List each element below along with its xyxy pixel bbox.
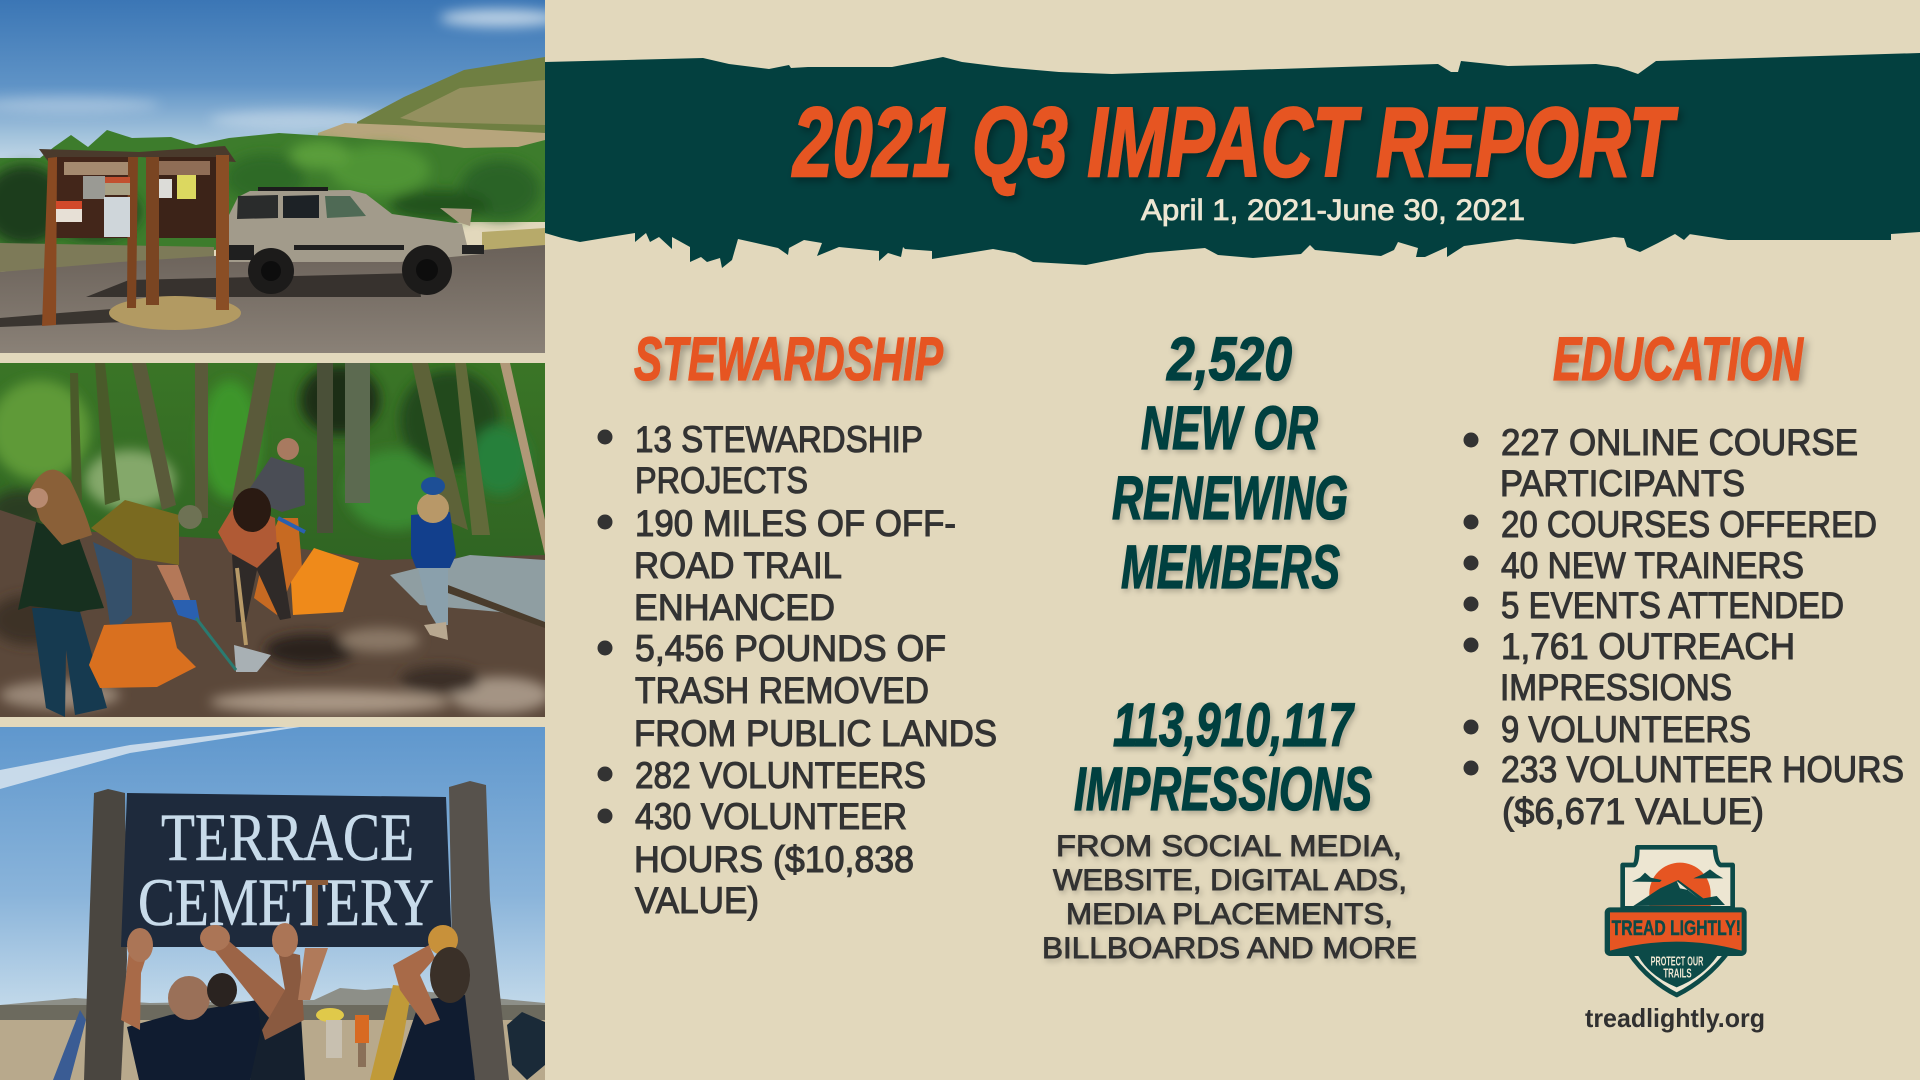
right post (449, 781, 509, 1080)
stewardship list: PROJECTS (635, 460, 808, 501)
panel: members stat: 2,520 (1166, 325, 1292, 393)
education list: IMPRESSIONS (1500, 667, 1732, 708)
background person with umbrella (316, 1008, 369, 1067)
banner: torn dark green strip (545, 53, 1920, 268)
jeep shadow (86, 273, 421, 297)
education list: 5 EVENTS ATTENDED (1501, 585, 1844, 626)
orange trash bag right (291, 548, 359, 615)
stewardship list: ENHANCED (634, 587, 835, 628)
person: girl in green sweater (18, 470, 107, 717)
education list: PARTICIPANTS (1500, 463, 1745, 504)
person: girl in blue jacket (411, 477, 456, 640)
stewardship heading: STEWARDSHIP (634, 325, 943, 393)
logo: tread lightly shield: PROTECT OUR (1651, 955, 1703, 969)
stewardship list: HOURS ($10,838 (634, 839, 914, 880)
education list: 9 VOLUNTEERS (1501, 709, 1751, 750)
person: man in plaid shirt (91, 500, 202, 632)
panel: members stat: RENEWING (1112, 464, 1348, 532)
panel: members stat: MEMBERS (1121, 533, 1340, 601)
impressions description: MEDIA PLACEMENTS, (1066, 898, 1393, 931)
date range subtitle: April 1, 2021-June 30, 2021 (1141, 194, 1525, 227)
logo: tread lightly shield: TRAILS (1663, 966, 1692, 980)
dry grass tuft (109, 296, 241, 330)
impressions figure: IMPRESSIONS (1074, 755, 1372, 823)
stewardship list: TRASH REMOVED (635, 670, 929, 711)
panel: stewardship (598, 325, 997, 921)
stewardship list (598, 419, 997, 921)
logo: tread lightly shield (1605, 847, 1747, 995)
stewardship list: 190 MILES OF OFF- (635, 503, 956, 544)
kiosk (39, 146, 236, 326)
impressions description: BILLBOARDS AND MORE (1042, 932, 1417, 965)
stewardship list: 5,456 POUNDS OF (635, 628, 946, 669)
panel: members stat: NEW OR (1141, 394, 1318, 462)
panel: education (1464, 325, 1904, 832)
panel: impressions stat (1042, 691, 1417, 965)
sign board: CEMETERY (138, 864, 434, 940)
education list: 1,761 OUTREACH (1501, 626, 1795, 667)
education list (1464, 422, 1904, 832)
jeep (229, 187, 484, 295)
sign board: TERRACE (161, 799, 414, 875)
education list: 20 COURSES OFFERED (1501, 504, 1877, 545)
photo: kiosk and jeep (0, 0, 560, 353)
education list: ($6,671 VALUE) (1502, 791, 1764, 832)
impressions figure (1074, 691, 1372, 823)
panel: members stat (1112, 325, 1348, 601)
blue brace and ladder (53, 1010, 86, 1080)
stewardship list: 282 VOLUNTEERS (635, 755, 926, 796)
far right person (507, 1012, 545, 1080)
stewardship list: VALUE) (635, 880, 759, 921)
education heading: EDUCATION (1553, 325, 1804, 393)
volunteers lifting the sign (121, 923, 475, 1080)
impressions description: WEBSITE, DIGITAL ADS, (1053, 864, 1407, 897)
stewardship list: 13 STEWARDSHIP (635, 419, 923, 460)
logo: tread lightly shield: TREAD LIGHTLY! (1612, 916, 1741, 940)
stewardship list: ROAD TRAIL (634, 545, 842, 586)
stewardship list: FROM PUBLIC LANDS (634, 713, 997, 754)
photo: terrace cemetery sign (0, 727, 545, 1080)
shovel (196, 518, 305, 672)
sign board (121, 793, 452, 947)
impressions description: FROM SOCIAL MEDIA, (1056, 830, 1402, 863)
person: man with orange pants (250, 438, 305, 615)
impressions description (1042, 830, 1417, 965)
person: woman in rust top (218, 488, 291, 622)
website url: treadlightly.org (1585, 1003, 1765, 1033)
impressions figure: 113,910,117 (1113, 691, 1355, 759)
orange trash bag left (89, 622, 196, 688)
education list: 40 NEW TRAINERS (1501, 545, 1804, 586)
stewardship list: 430 VOLUNTEER (635, 796, 907, 837)
photo: volunteers cleaning up forest trail (0, 363, 550, 717)
left post (84, 789, 127, 1080)
education list: 227 ONLINE COURSE (1501, 422, 1858, 463)
